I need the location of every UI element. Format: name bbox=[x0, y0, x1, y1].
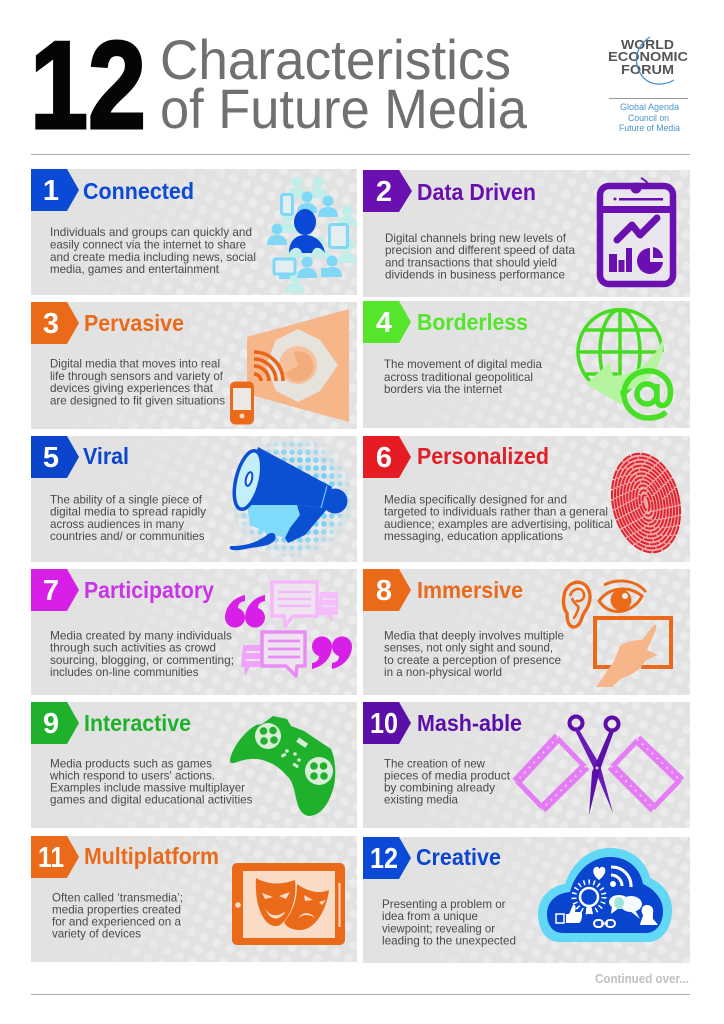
body text: life through sensors and variety of bbox=[50, 369, 224, 383]
body text: and transactions that should yield bbox=[385, 256, 557, 270]
heading: Mash-able bbox=[417, 710, 522, 736]
body text: for and experienced on a bbox=[52, 914, 181, 928]
body text: viewpoint; revealing or bbox=[382, 922, 495, 936]
body text bbox=[50, 628, 234, 679]
big number 12: 12 bbox=[30, 17, 146, 155]
tab 7: 7 bbox=[43, 575, 59, 607]
body text: The creation of new bbox=[384, 756, 485, 770]
body text: Media products such as games bbox=[50, 756, 212, 770]
body text: are designed to fit given situations bbox=[50, 394, 225, 408]
panel: 8 Immersive bbox=[363, 569, 690, 695]
icon: ear, eye and touch tablet bbox=[563, 581, 671, 687]
body text: Individuals and groups can quickly and bbox=[50, 225, 252, 239]
icon: connected people bbox=[267, 176, 357, 293]
title line 2: of Future Media bbox=[160, 77, 528, 140]
heading: Viral bbox=[83, 443, 129, 469]
body text: digital media to spread rapidly bbox=[50, 504, 206, 518]
tab 8 bbox=[363, 569, 411, 611]
body text: audience; examples are advertising, political bbox=[384, 517, 613, 531]
icon: tablet with theatre masks bbox=[232, 863, 345, 945]
body text bbox=[382, 897, 516, 948]
tab 12 bbox=[363, 837, 411, 879]
icon: clipboard chart bbox=[600, 178, 673, 284]
continued note: Continued over... bbox=[595, 972, 689, 986]
logo: World Economic Forum: Global Agenda bbox=[620, 102, 679, 112]
heading: Creative bbox=[416, 844, 501, 870]
body text: Digital channels bring new levels of bbox=[385, 231, 567, 245]
body text: across traditional geopolitical bbox=[384, 370, 533, 384]
logo: World Economic Forum: Council on bbox=[628, 113, 669, 123]
icon: idea cloud bbox=[538, 848, 672, 942]
body text: devices giving experiences that bbox=[50, 381, 214, 395]
body text bbox=[384, 492, 613, 543]
body text bbox=[50, 225, 256, 276]
heading: Interactive bbox=[84, 710, 191, 736]
panel: 9 Interactive bbox=[31, 702, 357, 828]
panel: 11 Multiplatform bbox=[31, 836, 357, 962]
logo: World Economic Forum: ECONOMIC bbox=[608, 49, 689, 64]
logo: World Economic Forum: WORLD bbox=[621, 37, 674, 52]
tab 2 bbox=[363, 170, 412, 212]
tab 1 bbox=[31, 169, 79, 211]
tab 4: 4 bbox=[376, 307, 392, 339]
body text bbox=[384, 628, 564, 679]
body text: to create a perception of presence bbox=[384, 653, 561, 667]
body text bbox=[50, 492, 206, 543]
body text: in a non-physical world bbox=[384, 665, 502, 679]
panel: 3 Pervasive bbox=[31, 302, 357, 429]
heading: Personalized bbox=[417, 443, 549, 469]
icon: fingerprint bbox=[603, 447, 689, 559]
body text: Often called ‘transmedia’; bbox=[52, 890, 183, 904]
body text: Presenting a problem or bbox=[382, 897, 506, 911]
panel: 1 Connected bbox=[31, 169, 357, 295]
tab 2: 2 bbox=[376, 176, 392, 208]
body text bbox=[49, 756, 253, 806]
icon: speech bubbles and quotes bbox=[225, 582, 352, 676]
tab 5 bbox=[31, 436, 79, 478]
icon: megaphone bbox=[230, 436, 351, 558]
icon: game controller bbox=[230, 716, 335, 816]
tab 4 bbox=[363, 301, 411, 343]
panel: 12 Creative bbox=[363, 837, 690, 963]
tab 11: 11 bbox=[38, 842, 64, 874]
body text: which respond to users' actions. bbox=[49, 768, 215, 782]
panel: 5 Viral bbox=[31, 433, 357, 562]
body text: includes on-line communities bbox=[50, 665, 198, 679]
body text: borders via the internet bbox=[384, 382, 503, 396]
logo: World Economic Forum: FORUM bbox=[621, 62, 674, 77]
heading: Borderless bbox=[417, 309, 528, 335]
icon: globe and at sign bbox=[578, 310, 670, 418]
tab 10: 10 bbox=[370, 708, 398, 740]
icon: scissors and film strips bbox=[516, 716, 681, 815]
body text: pieces of media product bbox=[384, 768, 511, 782]
body text: through such activities as crowd bbox=[50, 640, 216, 654]
heading: Pervasive bbox=[84, 310, 184, 336]
body text: existing media bbox=[384, 792, 458, 806]
panel: 4 Borderless bbox=[363, 301, 690, 428]
body text: Media that deeply involves multiple bbox=[384, 628, 564, 642]
heading: Immersive bbox=[417, 577, 523, 603]
title bbox=[30, 17, 528, 155]
logo: World Economic Forum: Future of Media bbox=[619, 123, 680, 133]
body text: games and digital educational activities bbox=[50, 792, 252, 806]
body text: idea from a unique bbox=[382, 909, 478, 923]
tab 6 bbox=[363, 436, 411, 478]
body text: Digital media that moves into real bbox=[50, 356, 220, 370]
tab 12: 12 bbox=[370, 843, 398, 875]
tab 7 bbox=[31, 569, 79, 611]
body text bbox=[384, 357, 542, 396]
tab 3: 3 bbox=[43, 308, 59, 340]
panel: 6 Personalized bbox=[363, 436, 690, 562]
heading: Multiplatform bbox=[84, 843, 219, 869]
body text: The movement of digital media bbox=[384, 357, 542, 371]
body text bbox=[52, 890, 183, 940]
body text: messaging, education applications bbox=[384, 529, 563, 543]
body text: sourcing, blogging, or commenting; bbox=[50, 653, 234, 667]
body text: Media specifically designed for and bbox=[384, 492, 567, 506]
body text: by combining already bbox=[384, 780, 495, 794]
panel: 2 Data Driven bbox=[363, 170, 690, 297]
body text: Media created by many individuals bbox=[50, 628, 232, 642]
body text: Examples include massive multiplayer bbox=[50, 780, 245, 794]
body text: precision and different speed of data bbox=[385, 243, 575, 257]
body text: countries and/ or communities bbox=[50, 529, 204, 543]
tab 5: 5 bbox=[43, 442, 59, 474]
body text: across audiences in many bbox=[50, 517, 184, 531]
title line 1: Characteristics bbox=[160, 28, 511, 91]
tab 9: 9 bbox=[43, 708, 59, 740]
body text bbox=[384, 756, 511, 806]
tab 10 bbox=[363, 702, 411, 744]
tab 11 bbox=[31, 836, 79, 878]
body text bbox=[385, 231, 575, 282]
body text: targeted to individuals rather than a general bbox=[384, 504, 608, 518]
body text: variety of devices bbox=[52, 926, 141, 940]
body text: and create media including news, social bbox=[50, 250, 256, 264]
tab 9 bbox=[31, 702, 79, 744]
tab 3 bbox=[31, 302, 79, 344]
heading: Participatory bbox=[84, 577, 214, 603]
heading: Connected bbox=[83, 178, 194, 204]
body text: dividends in business performance bbox=[385, 268, 565, 282]
body text: media properties created bbox=[52, 902, 181, 916]
body text bbox=[50, 356, 225, 408]
tab 6: 6 bbox=[376, 442, 392, 474]
tab 8: 8 bbox=[376, 575, 392, 607]
icon: phone and projection bbox=[231, 309, 349, 423]
body text: senses, not only sight and sound, bbox=[384, 640, 553, 654]
logo: World Economic Forum bbox=[608, 37, 689, 133]
body text: The ability of a single piece of bbox=[50, 492, 203, 506]
body text: media, games and entertainment bbox=[50, 262, 220, 276]
panel: 7 Participatory bbox=[31, 569, 357, 695]
body text: easily connect via the internet to share bbox=[50, 238, 246, 252]
body text: leading to the unexpected bbox=[382, 934, 516, 948]
tab 1: 1 bbox=[43, 175, 59, 207]
panel: 10 Mash-able bbox=[363, 702, 690, 828]
heading: Data Driven bbox=[417, 179, 536, 205]
